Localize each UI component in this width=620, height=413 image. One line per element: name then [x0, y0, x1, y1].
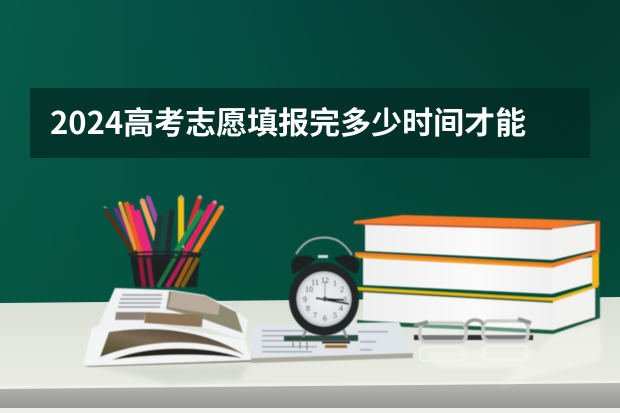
alarm clock — [284, 238, 359, 341]
numerals: 5 — [333, 311, 337, 320]
paper clips and colour strip under clock — [293, 340, 350, 350]
numerals: 3 — [343, 295, 347, 304]
book: top orange — [354, 215, 600, 260]
face — [296, 272, 352, 326]
numerals: 12 — [321, 276, 329, 285]
reading glasses — [414, 319, 533, 361]
bells — [291, 255, 359, 274]
numerals: 11 — [311, 278, 319, 287]
numerals: 2 — [340, 285, 344, 294]
pencils behind the rim — [105, 197, 222, 256]
numerals: 8 — [306, 304, 310, 313]
pencil holder with coloured pencils — [103, 195, 224, 287]
book: bottom green — [357, 283, 600, 334]
book: middle yellow — [355, 250, 600, 294]
open magazine — [83, 288, 413, 367]
right page — [251, 322, 413, 363]
numerals: 9 — [303, 295, 307, 304]
clock base shadow plate — [284, 335, 358, 341]
lenses — [420, 321, 528, 342]
hands — [316, 281, 349, 304]
numerals: 10 — [305, 285, 313, 294]
frame — [420, 320, 528, 342]
numerals: 1 — [333, 279, 337, 288]
case — [289, 262, 359, 336]
stack of three books — [354, 215, 600, 334]
title text: 2024高考志愿填报完多少时间才能 — [50, 98, 526, 143]
numerals — [303, 276, 347, 323]
mesh cup — [129, 252, 201, 287]
numerals: 7 — [313, 311, 317, 320]
numerals: 4 — [339, 304, 343, 313]
top left page — [96, 288, 248, 340]
feet — [303, 326, 347, 338]
pencil tips — [103, 195, 224, 209]
handle — [296, 238, 352, 255]
background: green chalkboard wall — [0, 0, 620, 305]
temple arms — [414, 335, 533, 340]
white glossy table — [0, 297, 620, 413]
numerals: 6 — [323, 314, 327, 323]
reflection of glasses — [420, 346, 528, 361]
title banner — [30, 88, 590, 158]
left pages stack — [83, 318, 251, 367]
